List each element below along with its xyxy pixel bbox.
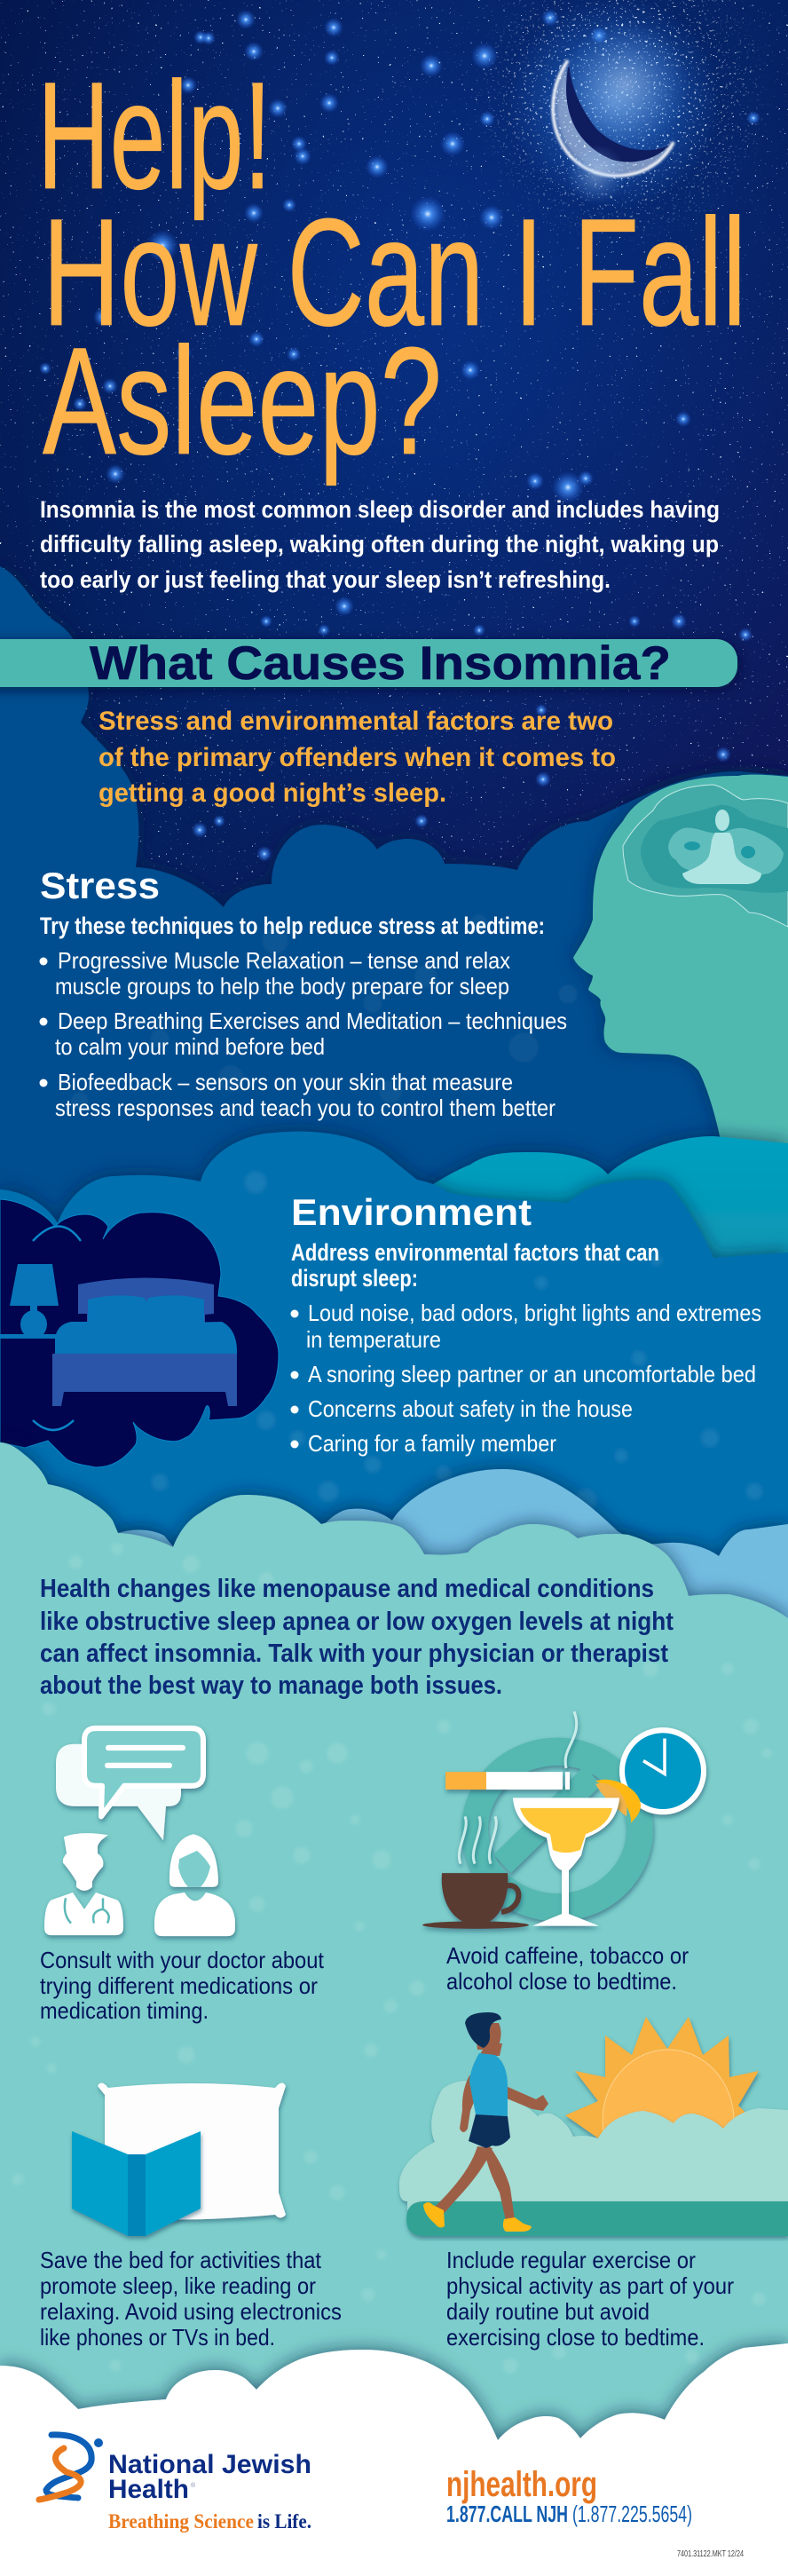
icon: lamp: [0, 1264, 59, 1339]
stress text block: stress responses and teach you to control them better: [55, 1094, 556, 1121]
stress text block: Try these techniques to help reduce stress at bedtime:: [40, 913, 545, 939]
environment cloud: [0, 1132, 788, 1598]
intro paragraph: difficulty falling asleep, waking often during the night, waking up: [40, 531, 719, 557]
stress text block: Biofeedback – sensors on your skin that measure: [58, 1069, 513, 1095]
white footer cloud: [0, 2343, 788, 2576]
crescent moon: [508, 0, 721, 209]
intro paragraph: [40, 496, 720, 593]
environment text block: in temperature: [306, 1326, 441, 1353]
caption: regular exercise: Include regular exercise or: [446, 2247, 696, 2273]
light blue clouds: [106, 1469, 788, 1687]
icon: helix mark: [39, 2435, 103, 2500]
dark thought cloud: [0, 1199, 279, 1467]
pale cloud: [399, 2081, 788, 2210]
stress text block: Progressive Muscle Relaxation – tense and relax: [58, 947, 510, 974]
intro paragraph: too early or just feeling that your sleep isn’t refreshing.: [40, 566, 611, 593]
stress text block: Deep Breathing Exercises and Meditation – techniques: [58, 1007, 567, 1034]
title: [37, 51, 746, 486]
stress text block: [39, 865, 567, 1121]
caption: avoid caffeine: alcohol close to bedtime.: [446, 1968, 677, 1995]
starry night sky background: [0, 0, 788, 994]
caption: save the bed: [40, 2247, 342, 2351]
cigarette: [445, 1711, 577, 1790]
environment text block: A snoring sleep partner or an uncomfortable bed: [308, 1361, 756, 1387]
logo: National Jewish Health: Breathing Science: [108, 2510, 254, 2533]
logo: National Jewish Health: is Life.: [257, 2510, 311, 2533]
icon: avoid caffeine tobacco alcohol: [422, 1711, 704, 1929]
caption: regular exercise: exercising close to bedtime.: [446, 2324, 705, 2351]
orange subheading: [98, 707, 616, 808]
stress text block: to calm your mind before bed: [55, 1033, 325, 1060]
caption: consult doctor: medication timing.: [40, 1997, 209, 2024]
caption: save the bed: promote sleep, like reading or: [40, 2272, 316, 2299]
caption: consult doctor: trying different medications or: [40, 1972, 318, 1999]
icon: book and pillow: [72, 2082, 286, 2236]
clock: [622, 1730, 704, 1812]
intro paragraph: Insomnia is the most common sleep disorder and includes having: [40, 496, 720, 523]
title: Asleep?: [43, 316, 442, 486]
environment text block: Environment: [291, 1191, 532, 1233]
health changes paragraph: about the best way to manage both issues.: [40, 1671, 502, 1700]
patient: [169, 1834, 218, 1887]
health changes paragraph: can affect insomnia. Talk with your physician or therapist: [40, 1640, 668, 1668]
caption: save the bed: like phones or TVs in bed.: [40, 2324, 275, 2351]
caption: consult doctor: [40, 1947, 325, 2024]
thought cloud with bed: [0, 1199, 279, 1467]
banner: what causes insomnia: What Causes Insomnia?: [90, 637, 671, 690]
caption: regular exercise: [446, 2247, 734, 2351]
caption: avoid caffeine: [446, 1942, 689, 1995]
icon: exercise scene with sun and runner: [399, 2012, 788, 2236]
stress text block: Stress: [40, 865, 160, 906]
health changes paragraph: [40, 1575, 674, 1700]
book: [72, 2131, 201, 2236]
orange subheading: of the primary offenders when it comes to: [98, 743, 616, 772]
title: Help!: [37, 51, 272, 221]
contact information: njhealth.org: [446, 2465, 597, 2504]
icon: doctor and patient conversation: [44, 1728, 235, 1936]
orange subheading: Stress and environmental factors are two: [98, 707, 613, 736]
ground: [406, 2201, 788, 2236]
no symbol ring: [475, 1751, 640, 1908]
environment text block: Caring for a family member: [308, 1430, 556, 1457]
teal-blue back cloud: [417, 1136, 788, 1331]
runner: [423, 2012, 548, 2232]
contact information: (1.877.225.5654): [572, 2501, 692, 2527]
environment text block: disrupt sleep:: [291, 1265, 418, 1292]
light teal cloud: lower section background: [0, 1442, 788, 2576]
logo: National Jewish Health: ®: [191, 2482, 196, 2489]
back speech bubble: [56, 1744, 181, 1841]
brain layers: [623, 785, 788, 927]
doctor: [63, 1833, 108, 1891]
caption: regular exercise: physical activity as part of your: [446, 2272, 734, 2299]
dark blue cloud: stress background: [0, 566, 788, 1260]
contact information: 1.877.CALL NJH: [446, 2501, 568, 2527]
logo: National Jewish Health: National Jewish: [108, 2450, 311, 2479]
icon: meditating figure: [682, 810, 761, 884]
caption: regular exercise: daily routine but avoid: [446, 2298, 650, 2325]
contact information: [446, 2465, 692, 2527]
head silhouette with layered brain: [573, 775, 788, 1154]
environment text block: Address environmental factors that can: [291, 1239, 659, 1266]
lemon slice: [595, 1780, 641, 1823]
health changes paragraph: Health changes like menopause and medical conditions: [40, 1575, 654, 1603]
environment text block: [291, 1191, 761, 1457]
stress text block: muscle groups to help the body prepare for sleep: [55, 973, 509, 1000]
sun: [565, 2017, 760, 2192]
orange subheading: getting a good night’s sleep.: [98, 778, 446, 808]
icon: bed: [52, 1278, 237, 1406]
coffee cup: [422, 1816, 529, 1929]
caption: save the bed: Save the bed for activities that: [40, 2247, 322, 2273]
martini glass: [513, 1798, 619, 1926]
caption: consult doctor: Consult with your doctor about: [40, 1947, 325, 1973]
pillow: [98, 2082, 286, 2220]
logo: National Jewish Health: [39, 2435, 311, 2533]
caption: avoid caffeine: Avoid caffeine, tobacco or: [446, 1942, 689, 1969]
health changes paragraph: like obstructive sleep apnea or low oxygen levels at night: [40, 1608, 674, 1636]
caption: save the bed: relaxing. Avoid using electronics: [40, 2298, 342, 2325]
logo: National Jewish Health: Health: [108, 2475, 189, 2504]
document code: 7401.31122.MKT 12/24: [677, 2549, 744, 2559]
environment text block: Concerns about safety in the house: [308, 1395, 633, 1422]
front speech bubble: [84, 1728, 203, 1816]
